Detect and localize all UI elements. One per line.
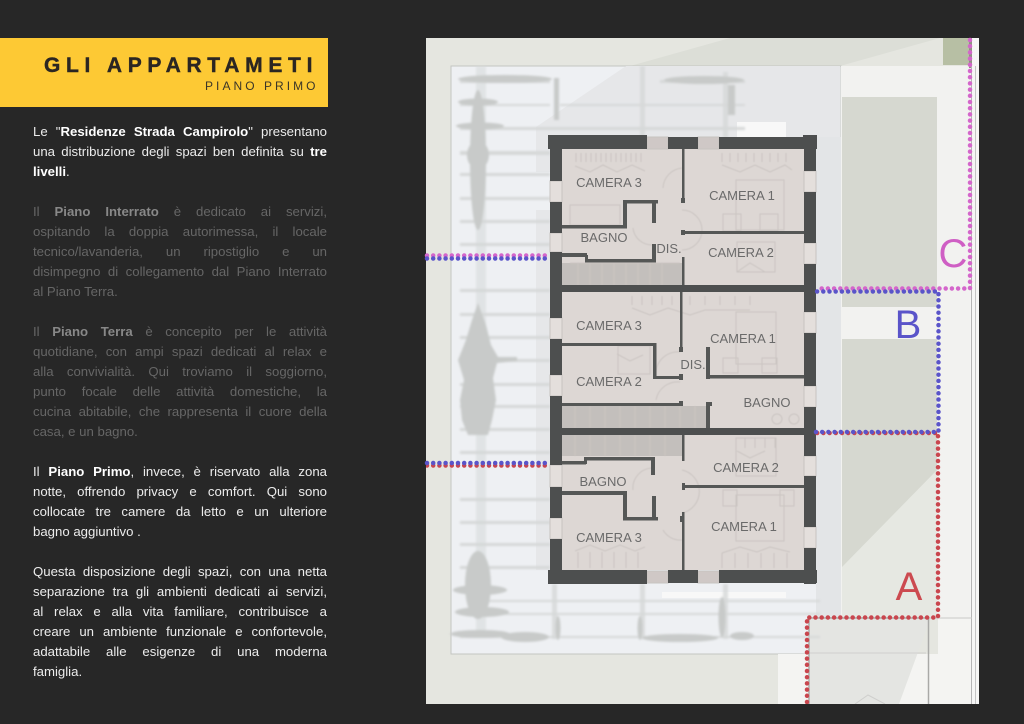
text block: conclusion: famiglia. <box>33 664 82 679</box>
text block: piano primo: notte, offrendo privacy e comfort. Qui sono <box>33 484 327 499</box>
text block: piano terra: casa, e un bagno. <box>33 424 138 439</box>
boundary line A (red) <box>427 433 938 702</box>
room labels: CAMERA 2 <box>708 245 774 260</box>
garden and trees <box>450 66 820 642</box>
text block: introduction <box>33 124 327 179</box>
text block: piano terra <box>33 324 327 439</box>
label A: A <box>896 565 923 609</box>
text block: piano primo: Il Piano Primo, invece, è riservato alla zona <box>33 464 327 479</box>
text block: piano interrato: al Piano Terra. <box>33 284 118 299</box>
furniture and fixtures <box>570 153 799 568</box>
green areas <box>842 38 976 704</box>
room labels: DIS. <box>656 241 682 256</box>
floor plan figure <box>424 38 979 704</box>
text block: piano terra: cucina abitabile, che rappresenta il cuore della <box>33 404 327 419</box>
text block: conclusion: separazione tra gli ambienti dedicati ai servizi, <box>33 584 327 599</box>
text block: conclusion: creare un ambiente funzionale e confortevole, <box>33 624 327 639</box>
text block: piano terra: quotidiane, con ampi spazi dedicati al relax e <box>33 344 327 359</box>
text block: introduction: una distribuzione degli spazi ben definita su tre <box>33 144 327 159</box>
text block: piano primo: bagno aggiuntivo . <box>33 524 141 539</box>
interior walls <box>562 149 804 570</box>
text block: piano primo: collocate tre camere da letto e un ulteriore <box>33 504 327 519</box>
room labels: CAMERA 1 <box>710 331 776 346</box>
text block: piano terra: alla convivialità. Qui troviamo il soggiorno, <box>33 364 327 379</box>
text block: introduction: livelli. <box>33 164 70 179</box>
room labels: CAMERA 3 <box>576 530 642 545</box>
text block: piano primo <box>33 464 327 539</box>
text block: piano terra: punto focale delle attività domestiche, la <box>33 384 327 399</box>
site background <box>426 38 979 704</box>
text block: piano interrato: tecnico/lavanderia, un ripostiglio e un <box>33 244 327 259</box>
text block: introduction: Le "Residenze Strada Campirolo" presentano <box>33 124 327 139</box>
room labels <box>576 175 790 545</box>
window frames <box>550 137 816 583</box>
text block: conclusion: al relax e alla vita familiare, contribuisce a <box>33 604 327 619</box>
apartment floors <box>562 149 804 570</box>
room labels: CAMERA 1 <box>711 519 777 534</box>
text block: piano interrato: disimpegno di collegamento dal Piano Interrato <box>33 264 327 279</box>
title banner <box>0 38 328 107</box>
boundary line C (magenta) <box>427 40 970 288</box>
subheading: PIANO PRIMO <box>205 79 319 93</box>
room labels: CAMERA 1 <box>709 188 775 203</box>
room labels: DIS. <box>680 357 706 372</box>
room labels: CAMERA 2 <box>576 374 642 389</box>
text block: piano interrato: ospitando la doppia autorimessa, il locale <box>33 224 327 239</box>
text block: piano interrato: Il Piano Interrato è dedicato ai servizi, <box>33 204 327 219</box>
text block: conclusion <box>33 564 327 679</box>
room labels: CAMERA 3 <box>576 318 642 333</box>
room labels: CAMERA 3 <box>576 175 642 190</box>
boundary line B (blue) <box>427 258 938 463</box>
label B: B <box>895 303 921 347</box>
exterior walls <box>548 135 817 584</box>
text block: conclusion: adattabile alle esigenze di una moderna <box>33 644 327 659</box>
label C: C <box>939 232 967 276</box>
room labels: BAGNO <box>580 474 626 489</box>
text block: conclusion: Questa disposizione degli spazi, con una netta <box>33 564 327 579</box>
room labels: BAGNO <box>581 230 627 245</box>
heading: GLI APPARTAMETI <box>44 54 318 77</box>
text block: piano interrato <box>33 204 327 299</box>
room labels: CAMERA 2 <box>713 460 779 475</box>
room labels: BAGNO <box>744 395 790 410</box>
garage box <box>809 618 928 704</box>
text block: piano terra: Il Piano Terra è concepito per le attività <box>33 324 327 339</box>
